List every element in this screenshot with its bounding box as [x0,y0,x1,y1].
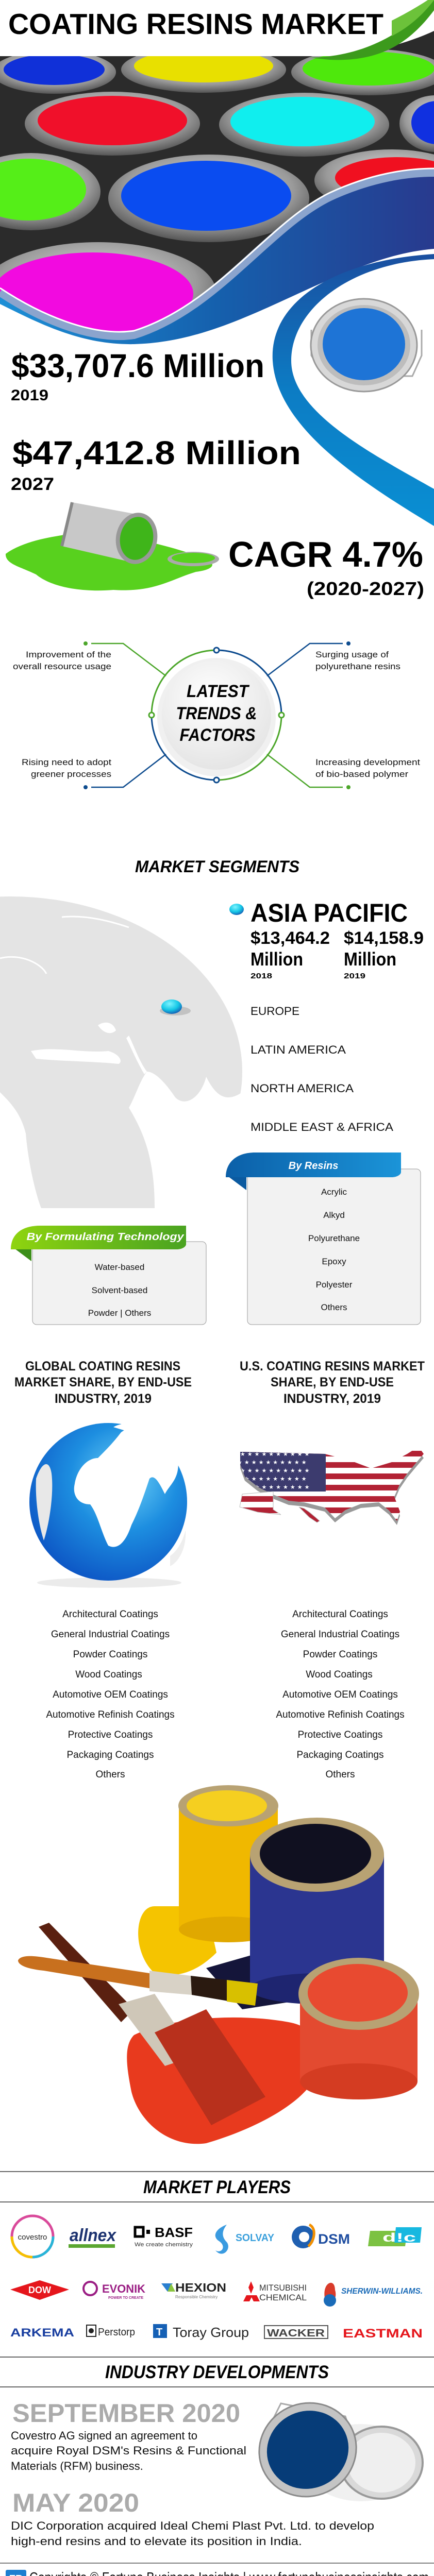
logo: Mitsubishi: MITSUBISHI [259,2283,307,2293]
blue can [206,1818,384,2009]
logos: market players [10,2216,423,2341]
heading: global share: MARKET SHARE, BY END-USE [14,1375,192,1389]
logo: Sherwin-Williams [324,2283,423,2307]
trend texts: Rising need to adopt [22,757,111,767]
stat: CAGR [228,534,424,599]
development: September 2020: acquire Royal DSM's Resins & Functional [11,2444,246,2457]
region: asia pacific [229,899,424,980]
logo: Eastman: EASTMAN [343,2327,423,2341]
panel: by resins: Polyester [316,1280,353,1290]
icon: US flag map: ★★★★★★★★★★★ [233,1451,311,1458]
panel: by resins: Acrylic [321,1187,347,1197]
logo: covestro: covestro [18,2233,47,2242]
logo: Toray: Toray Group [173,2325,249,2340]
icon: globe [29,1423,187,1588]
blue crescent arc [273,254,434,526]
logo: Evonik: POWER TO CREATE [108,2296,144,2300]
logo: Perstorp: Perstorp [98,2327,135,2338]
list: global end-use industries: Architectural Coatings [62,1609,158,1620]
title: COATING RESINS MARKET [8,8,383,41]
list: US end-use industries: Others [325,1769,355,1780]
development: September 2020: Materials (RFM) business. [11,2460,143,2472]
stat: 2027 value [11,434,301,494]
development: May 2020: high-end resins and to elevate its position in India. [11,2535,302,2548]
logo: DIC: d!c [382,2231,416,2245]
icon: FBI logo [6,2570,26,2576]
icon: open blue paint can and lid [244,2387,423,2513]
list: US end-use industries: Packaging Coatings [297,1750,383,1760]
red spill and can [127,1958,419,2144]
region: asia pacific: Million [251,948,303,970]
world map [0,896,242,1208]
list: US end-use industries: Powder Coatings [303,1649,377,1660]
heading: global share: INDUSTRY, 2019 [55,1392,152,1406]
logo: DIC [368,2227,422,2246]
region list: NORTH AMERICA [251,1082,354,1095]
stat: CAGR: CAGR 4.7% [228,534,423,574]
region list: EUROPE [251,1005,299,1018]
icon: US flag map [239,1451,424,1525]
logo: Mitsubishi: CHEMICAL [259,2293,307,2302]
heading: US share [240,1359,425,1406]
logo: Evonik [84,2282,145,2300]
heading: market segments: MARKET SEGMENTS [135,857,300,876]
logo: Hexion: HEXION [175,2281,226,2294]
logo: Perstorp [87,2325,135,2338]
logo: Dow: DOW [28,2285,51,2295]
heading: industry developments: INDUSTRY DEVELOPMENTS [105,2362,329,2382]
panel: by resins: By Resins [289,1160,338,1172]
stat: 2027 value: 2027 [11,474,54,494]
panel: by formulating technology [11,1226,206,1325]
icon: spilled green paint can [6,502,219,590]
region: asia pacific: 2019 [344,972,365,980]
icon: US flag map: ★★★★★★★★★★★ [233,1468,311,1474]
development: May 2020: DIC Corporation acquired Ideal Chemi Plast Pvt. Ltd. to develop [11,2519,374,2532]
panel: by resins: Others [321,1302,347,1312]
list: US end-use industries: Protective Coatings [298,1730,382,1740]
list: global end-use industries: Wood Coatings [75,1669,142,1680]
region list: MIDDLE EAST & AFRICA [251,1121,393,1133]
panel: by resins: Epoxy [322,1257,346,1266]
trend texts [13,650,420,779]
panel: by formulating technology: Powder | Others [88,1308,151,1318]
stat: 2019 value: 2019 [11,387,48,404]
yellow can [138,1785,278,1975]
logo: Wacker: WACKER [267,2328,325,2339]
trend texts: overall resource usage [13,662,111,671]
logo: DSM: DSM [318,2231,350,2247]
logo: Arkema: ARKEMA [10,2326,74,2339]
illustration: paint cans and brushes [18,1785,419,2144]
icon: blue paint can (top view) [311,299,422,392]
logo: Solvay [215,2225,275,2254]
panel: by formulating technology: Water-based [95,1262,144,1272]
list: global end-use industries: Protective Coatings [68,1730,153,1740]
panel: by formulating technology: By Formulating Technology [27,1231,185,1243]
logo: allnex: allnex [70,2226,117,2245]
list: US end-use industries: Architectural Coatings [292,1609,388,1620]
list: global end-use industries: Packaging Coatings [67,1750,154,1760]
connector lines [91,643,343,787]
trend texts: Improvement of the [26,650,111,659]
logo: Wacker [264,2326,328,2339]
list: global end-use industries: General Industrial Coatings [51,1629,170,1640]
logo: Solvay: SOLVAY [236,2232,275,2244]
icon: US flag map: ★★★★★★★★★★ [237,1460,309,1466]
heading: global share: GLOBAL COATING RESINS [25,1359,180,1374]
trend texts: Increasing development [315,757,420,767]
list: US end-use industries: General Industrial Coatings [281,1629,399,1640]
heading: US share: INDUSTRY, 2019 [283,1392,381,1406]
stat: 2019 value [11,347,264,404]
logo: covestro [12,2216,53,2257]
stat: CAGR: (2020-2027) [307,578,424,599]
list: global end-use industries: Automotive Refinish Coatings [46,1709,175,1720]
development: September 2020 [11,2399,246,2472]
development: May 2020: MAY 2020 [12,2488,139,2517]
panel: by resins [226,1153,421,1325]
heading: US share: U.S. COATING RESINS MARKET [240,1359,425,1374]
region list: LATIN AMERICA [251,1043,346,1056]
logo: Sherwin-Williams: SHERWIN-WILLIAMS. [341,2287,423,2296]
logo: DSM [292,2225,350,2248]
logo: BASF: BASF [155,2225,193,2240]
region: asia pacific: 2018 [251,972,272,980]
heading: market players: MARKET PLAYERS [143,2177,291,2197]
blue wave band [0,168,434,344]
stat: 2027 value: $47,412.8 Million [12,434,301,471]
logo: BASF: We create chemistry [135,2242,193,2248]
hero photo: paint cans [0,28,434,348]
list: global end-use industries: Automotive OEM Coatings [53,1689,168,1700]
icon: US flag map: ★★★★★★★★★★ [237,1476,309,1482]
panel: by resins: Alkyd [323,1210,345,1220]
list: US end-use industries: Automotive Refinish Coatings [276,1709,405,1720]
logo: Mitsubishi [243,2281,307,2302]
list: US end-use industries: Wood Coatings [306,1669,373,1680]
trends heading: FACTORS [179,725,256,745]
heading: global share [14,1359,192,1406]
trend texts: polyurethane resins [315,662,400,671]
footer [0,2563,434,2576]
development: May 2020 [11,2488,374,2548]
region: asia pacific: $13,464.2 [251,928,330,948]
trends heading [176,682,257,745]
list: global end-use industries: Powder Coatings [73,1649,147,1660]
region: asia pacific: $14,158.9 [344,928,424,948]
stat: 2019 value: $33,707.6 Million [11,347,264,384]
list: global end-use industries [46,1609,175,1780]
list: US end-use industries [276,1609,405,1780]
logo: Toray: T [156,2327,162,2338]
logo: BASF [135,2225,193,2248]
logo: Dow [10,2280,69,2300]
list: US end-use industries: Automotive OEM Coatings [282,1689,398,1700]
panel: by resins: Polyurethane [308,1233,360,1243]
logo: Hexion: Responsible Chemistry [175,2295,218,2299]
region: asia pacific: ASIA PACIFIC [251,899,408,927]
logo: Hexion [161,2281,226,2299]
development: September 2020: SEPTEMBER 2020 [12,2399,240,2428]
list: global end-use industries: Others [95,1769,125,1780]
trends heading: LATEST [187,682,250,701]
green swoosh [309,0,434,60]
brushes [18,1923,265,2125]
heading: US share: SHARE, BY END-USE [271,1375,394,1389]
development: September 2020: Covestro AG signed an agreement to [11,2429,197,2442]
logo: Evonik: EVONIK [102,2282,145,2295]
icon: US flag map: ★★★★★★★★★★★ [233,1484,311,1490]
trend texts: greener processes [31,769,111,779]
trend texts: of bio-based polymer [315,769,408,779]
panel: by formulating technology: Solvent-based [92,1285,147,1295]
region list [251,1005,393,1133]
trends heading: TRENDS & [176,704,257,723]
panel: latest trends & factors [13,641,420,789]
region: asia pacific: Million [344,948,396,970]
trend texts: Surging usage of [315,650,389,659]
